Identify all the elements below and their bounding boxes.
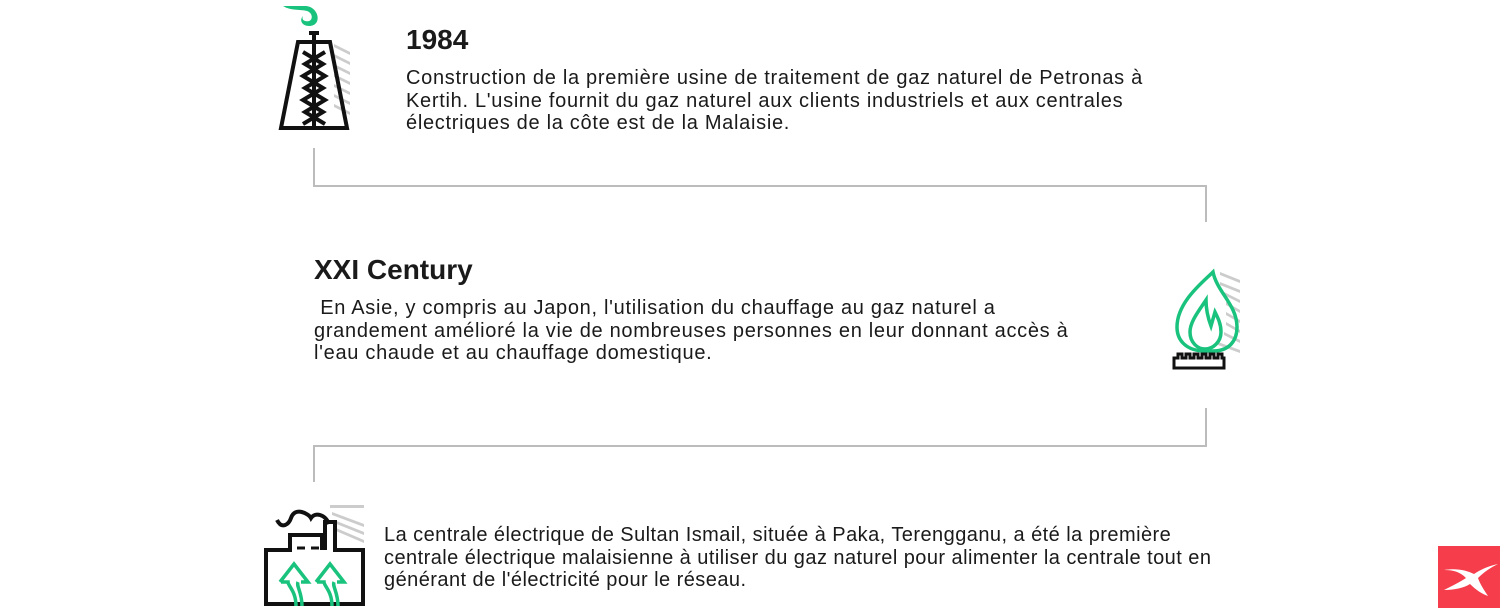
text: 1984: Construction de la première usine de traitement de gaz naturel de Petronas à xyxy=(406,67,1143,89)
icon: oil derrick xyxy=(278,6,350,130)
text: power plant: centrale électrique malaisienne à utiliser du gaz naturel pour alimenter la centrale tout en xyxy=(384,546,1211,568)
text: 1984 xyxy=(406,67,1143,134)
text: power plant xyxy=(384,524,1211,591)
logo xyxy=(1438,546,1500,608)
icon: gas flame xyxy=(1172,268,1240,370)
text: XXI Century: En Asie, y compris au Japon, l'utilisation du chauffage au gaz naturel a xyxy=(320,297,996,319)
heading: XXI Century: XXI Century xyxy=(314,254,473,285)
text: 1984: électriques de la côte est de la Malaisie. xyxy=(406,112,790,134)
text: XXI Century: grandement amélioré la vie de nombreuses personnes en leur donnant accès à xyxy=(314,320,1068,342)
text: 1984: Kertih. L'usine fournit du gaz naturel aux clients industriels et aux centrales xyxy=(406,90,1123,112)
text: XXI Century xyxy=(314,297,1068,364)
text: power plant: générant de l'électricité pour le réseau. xyxy=(384,569,746,591)
heading: 1984: 1984 xyxy=(406,24,468,55)
text: power plant: La centrale électrique de Sultan Ismail, située à Paka, Terengganu, a été la première xyxy=(384,524,1171,546)
text: XXI Century: l'eau chaude et au chauffage domestique. xyxy=(314,342,712,364)
icon: power plant xyxy=(264,505,365,606)
